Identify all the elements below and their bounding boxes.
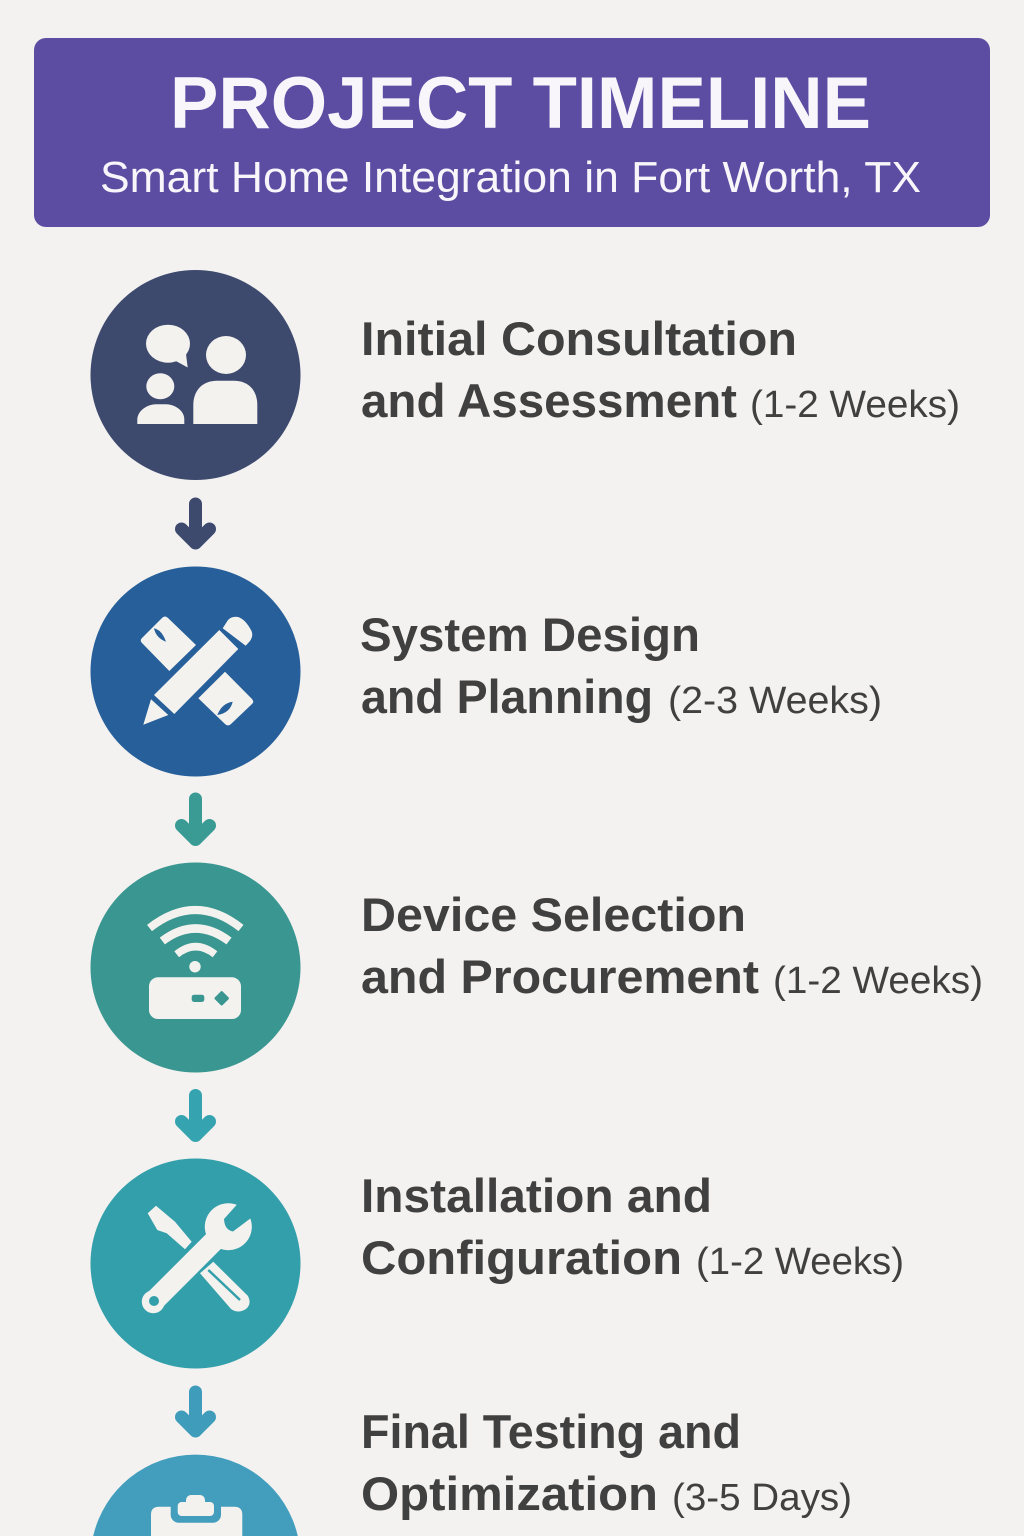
arrow 3 bbox=[182, 1096, 210, 1136]
arrow 4 bbox=[182, 1392, 210, 1431]
step 4 label: (1-2 Weeks) bbox=[696, 1241, 904, 1283]
step 5 label: Optimization bbox=[361, 1467, 658, 1520]
step 1 label: and Assessment bbox=[361, 374, 737, 427]
step 3 label: (1-2 Weeks) bbox=[773, 960, 983, 1002]
step 2 label: (2-3 Weeks) bbox=[668, 680, 882, 722]
step 3 label: Device Selection bbox=[361, 888, 746, 941]
step 3 icon: wifi router bbox=[90, 862, 300, 1072]
step 2 icon: design tools bbox=[90, 566, 300, 776]
step 1 label bbox=[361, 312, 960, 427]
step 2 label bbox=[360, 608, 882, 723]
step 1 icon: consultation bbox=[90, 270, 300, 480]
step 4 icon: tools bbox=[90, 1158, 300, 1368]
step 4 label: Configuration bbox=[361, 1231, 682, 1284]
arrow 1 bbox=[182, 504, 210, 543]
step 2 label: System Design bbox=[360, 608, 700, 661]
step 4 label bbox=[361, 1169, 904, 1284]
step 1 label: Initial Consultation bbox=[361, 312, 797, 365]
step 5 label: Final Testing and bbox=[361, 1405, 741, 1458]
step 5 label bbox=[361, 1405, 852, 1520]
step 3 label bbox=[361, 888, 983, 1003]
step 3 label: and Procurement bbox=[361, 950, 759, 1003]
step 4 label: Installation and bbox=[361, 1169, 712, 1222]
header banner bbox=[34, 38, 990, 227]
step 5 icon: clipboard bbox=[93, 1455, 298, 1536]
title: PROJECT TIMELINE bbox=[170, 63, 871, 144]
arrow 2 bbox=[182, 799, 210, 840]
step 1 label: (1-2 Weeks) bbox=[750, 384, 960, 426]
subtitle: Smart Home Integration in Fort Worth, TX bbox=[100, 153, 921, 202]
step 5 label: (3-5 Days) bbox=[672, 1477, 852, 1519]
step 2 label: and Planning bbox=[361, 670, 653, 723]
